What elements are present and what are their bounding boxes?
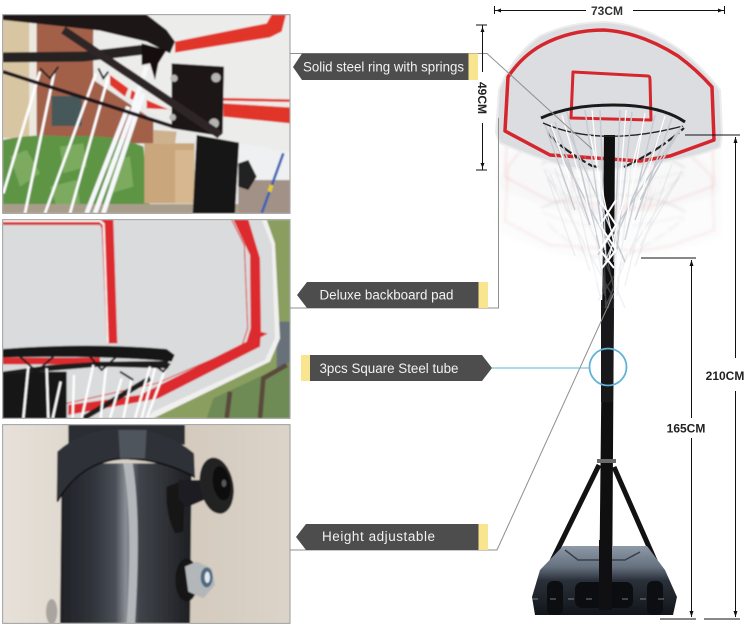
panel: height adjustable photo	[3, 425, 290, 624]
pole and base	[532, 135, 677, 615]
label: height adjustable: Height adjustable	[322, 529, 435, 544]
label: square steel tube	[301, 355, 492, 381]
dimension: width 73CM	[494, 4, 724, 18]
dimension: height 49CM	[475, 25, 489, 170]
label: solid steel ring: Solid steel ring with springs	[303, 58, 464, 74]
label: height adjustable	[296, 524, 488, 550]
product: basketball stand	[496, 22, 722, 615]
callout: tube circle	[492, 348, 626, 386]
panel: solid steel ring photo	[3, 15, 290, 213]
panel: deluxe backboard pad photo	[3, 220, 290, 418]
dimension: height 165CM: 165CM	[667, 422, 705, 436]
label: solid steel ring	[293, 54, 478, 80]
backboard	[496, 22, 722, 170]
dimension: height 49CM: 49CM	[475, 82, 489, 114]
dimension: height 165CM	[641, 258, 705, 619]
dimension: width 73CM: 73CM	[591, 4, 623, 18]
leader lines	[290, 54, 614, 550]
label: deluxe backboard pad	[297, 282, 488, 308]
dimension: height 210CM: 210CM	[706, 369, 744, 383]
dimension: height 210CM	[685, 135, 744, 619]
label: deluxe backboard pad: Deluxe backboard pad	[320, 288, 454, 302]
label: square steel tube: 3pcs Square Steel tube	[320, 361, 458, 376]
hoop ring and net	[541, 105, 685, 308]
